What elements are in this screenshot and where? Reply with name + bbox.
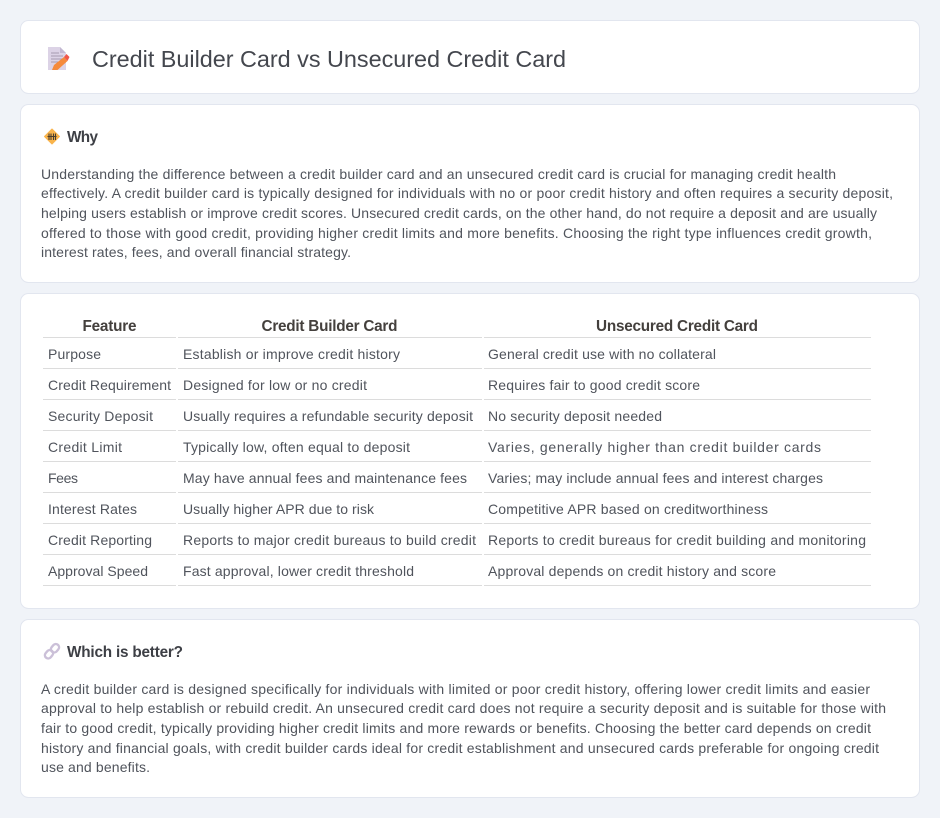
heading: which is better: Which is better? <box>67 644 183 661</box>
row: interest rates <box>48 501 768 517</box>
row: purpose: General credit use with no collateral <box>488 346 716 362</box>
text block: why paragraph: helping users establish or improve credit scores. Unsecured credit cards, on the other hand, do not require a deposit and are usually <box>41 205 877 221</box>
panel: which is better <box>20 620 920 798</box>
row: security deposit: Usually requires a refundable security deposit <box>183 408 473 424</box>
table header row: Feature <box>82 318 136 335</box>
panel: comparison table <box>20 294 920 608</box>
icon: memo with pencil <box>48 47 70 70</box>
text block: which is better paragraph: use and benefits. <box>41 759 150 775</box>
row: fees: Varies; may include annual fees and interest charges <box>488 470 823 486</box>
row: credit reporting <box>48 532 866 548</box>
row: credit reporting: Reports to credit bureaus for credit building and monitoring <box>488 532 866 548</box>
row: security deposit: Security Deposit <box>48 408 153 424</box>
text block: which is better paragraph: fair to good credit, typically providing higher credit limits and more rewards or benefits. Choosing the better card depends on credit <box>41 720 871 736</box>
table header row: Credit Builder Card <box>262 318 398 335</box>
row: credit requirement <box>48 377 700 393</box>
heading: why: Why <box>67 129 98 146</box>
row: security deposit: No security deposit needed <box>488 408 662 424</box>
row: purpose: Establish or improve credit history <box>183 346 400 362</box>
row: fees: May have annual fees and maintenance fees <box>183 470 467 486</box>
row: fees <box>48 470 823 486</box>
text block: why paragraph: effectively. A credit builder card is typically designed for individuals with no or poor credit history and often requires a security deposit, <box>41 185 893 201</box>
text block: which is better paragraph <box>41 681 886 775</box>
row: credit reporting: Reports to major credit bureaus to build credit <box>183 532 476 548</box>
row: credit limit: Typically low, often equal to deposit <box>183 439 410 455</box>
text block: which is better paragraph: history and financial goals, with credit builder cards ideal for credit establishment and unsecured cards preferable for ongoing credit <box>41 740 879 756</box>
icon: chain link <box>44 643 60 660</box>
row: credit requirement: Requires fair to good credit score <box>488 377 700 393</box>
icon: diamond sign <box>44 129 60 144</box>
text block: which is better paragraph: A credit builder card is designed specifically for individuals with limited or poor credit history, offering lower credit limits and easier <box>41 681 870 697</box>
row: credit requirement: Credit Requirement <box>48 377 171 393</box>
panel: header <box>20 20 920 94</box>
table header row: Unsecured Credit Card <box>596 318 758 335</box>
row: credit requirement: Designed for low or no credit <box>183 377 367 393</box>
row: interest rates: Interest Rates <box>48 501 137 517</box>
text block: why paragraph: interest rates, fees, and overall financial strategy. <box>41 244 351 260</box>
panel: why <box>20 104 920 282</box>
row: approval speed: Approval depends on credit history and score <box>488 563 776 579</box>
title: Credit Builder Card vs Unsecured Credit Card <box>92 46 566 72</box>
row: credit limit: Credit Limit <box>48 439 122 455</box>
row: approval speed: Approval Speed <box>48 563 148 579</box>
row: interest rates: Usually higher APR due to risk <box>183 501 375 517</box>
text block: why paragraph: Understanding the difference between a credit builder card and an unsecured credit card is crucial for managing credit health <box>41 166 836 182</box>
text block: which is better paragraph: approval to help establish or rebuild credit. An unsecured credit card does not require a security deposit and is suitable for those with <box>41 700 886 716</box>
row: purpose <box>48 346 716 362</box>
row: approval speed: Fast approval, lower credit threshold <box>183 563 414 579</box>
table header row <box>82 318 758 335</box>
row: approval speed <box>48 563 776 579</box>
row: credit limit <box>48 439 821 455</box>
row: interest rates: Competitive APR based on creditworthiness <box>488 501 768 517</box>
text block: why paragraph: offered to those with good credit, providing higher credit limits and more benefits. Choosing the right type influences credit growth, <box>41 225 872 241</box>
row: credit reporting: Credit Reporting <box>48 532 152 548</box>
row: credit limit: Varies, generally higher than credit builder cards <box>488 439 821 455</box>
text block: why paragraph <box>41 166 893 260</box>
row: purpose: Purpose <box>48 346 101 362</box>
row: fees: Fees <box>48 470 78 486</box>
row: security deposit <box>48 408 662 424</box>
